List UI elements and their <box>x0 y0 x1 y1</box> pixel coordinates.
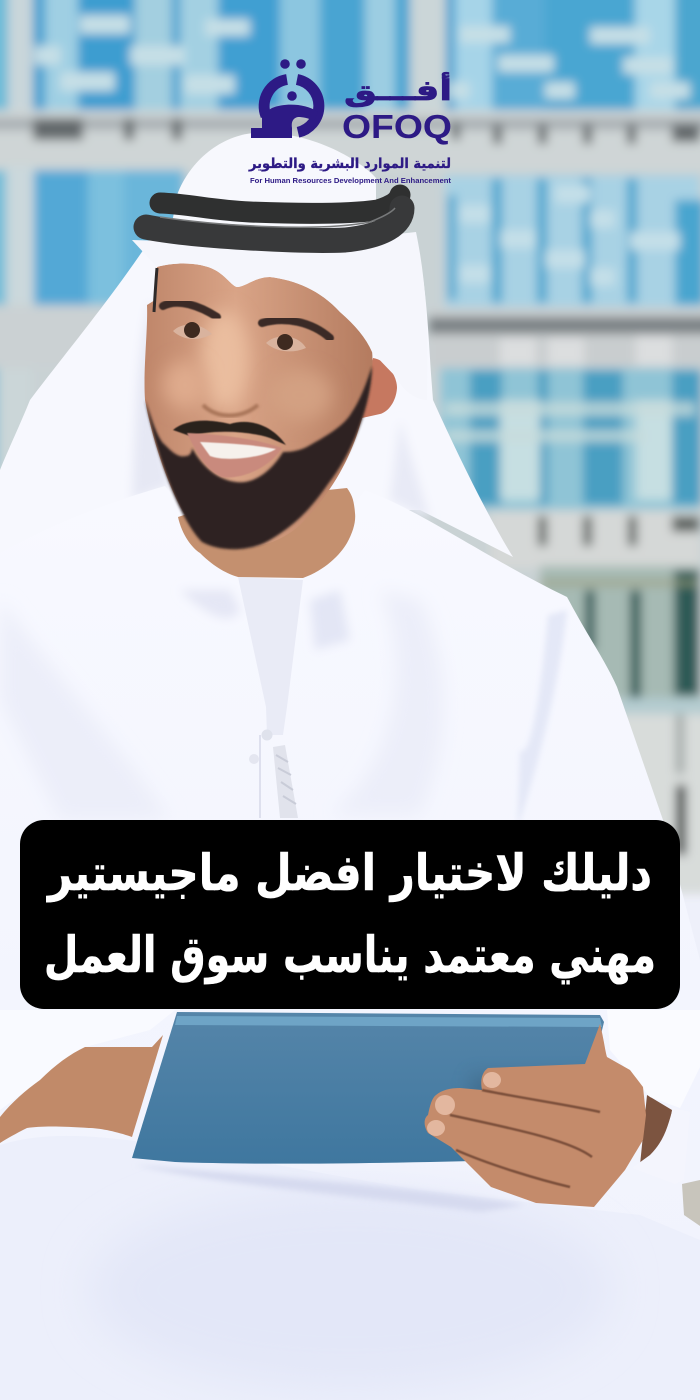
grey band 3 <box>490 510 700 568</box>
grey band 2 <box>0 305 700 368</box>
mouth <box>187 433 282 478</box>
neck <box>178 488 355 578</box>
left hand <box>0 1035 163 1143</box>
logo emblem <box>251 59 319 138</box>
beard <box>145 366 372 549</box>
eyebrows and eyes <box>163 303 330 351</box>
logo Arabic tagline: لتنمية الموارد البشرية والتطوير <box>248 156 451 172</box>
title panel <box>20 820 680 1009</box>
face <box>145 264 372 548</box>
grey band 1 <box>0 110 700 172</box>
window row 2 <box>0 165 700 315</box>
blurred building background <box>0 0 700 894</box>
kandura body <box>0 486 700 1400</box>
right hand <box>425 1024 646 1207</box>
agal headband <box>146 195 402 240</box>
logo: OFOQ <box>248 59 452 185</box>
collar placket with buttons and tassel <box>238 577 303 818</box>
right sleeve cuff <box>607 1010 700 1108</box>
ghutra drape <box>0 240 513 570</box>
sand behind cuff <box>682 1180 700 1226</box>
dark window row <box>540 566 700 698</box>
lap shading <box>0 1136 700 1400</box>
head cap <box>170 133 376 235</box>
ear <box>362 358 397 418</box>
tablet <box>132 1012 604 1164</box>
logo Latin name: OFOQ <box>342 108 452 145</box>
nose shadow <box>203 405 258 416</box>
lower band <box>620 698 700 894</box>
window row 1 <box>0 0 700 110</box>
logo Arabic name: أفـــق <box>344 72 452 107</box>
window row 3 <box>0 368 700 510</box>
pale reflections <box>35 15 690 99</box>
ghutra front <box>132 232 427 400</box>
right wrist <box>640 1095 672 1165</box>
logo English tagline: For Human Resources Development And Enhancement <box>250 176 451 185</box>
left sleeve <box>0 1010 175 1110</box>
